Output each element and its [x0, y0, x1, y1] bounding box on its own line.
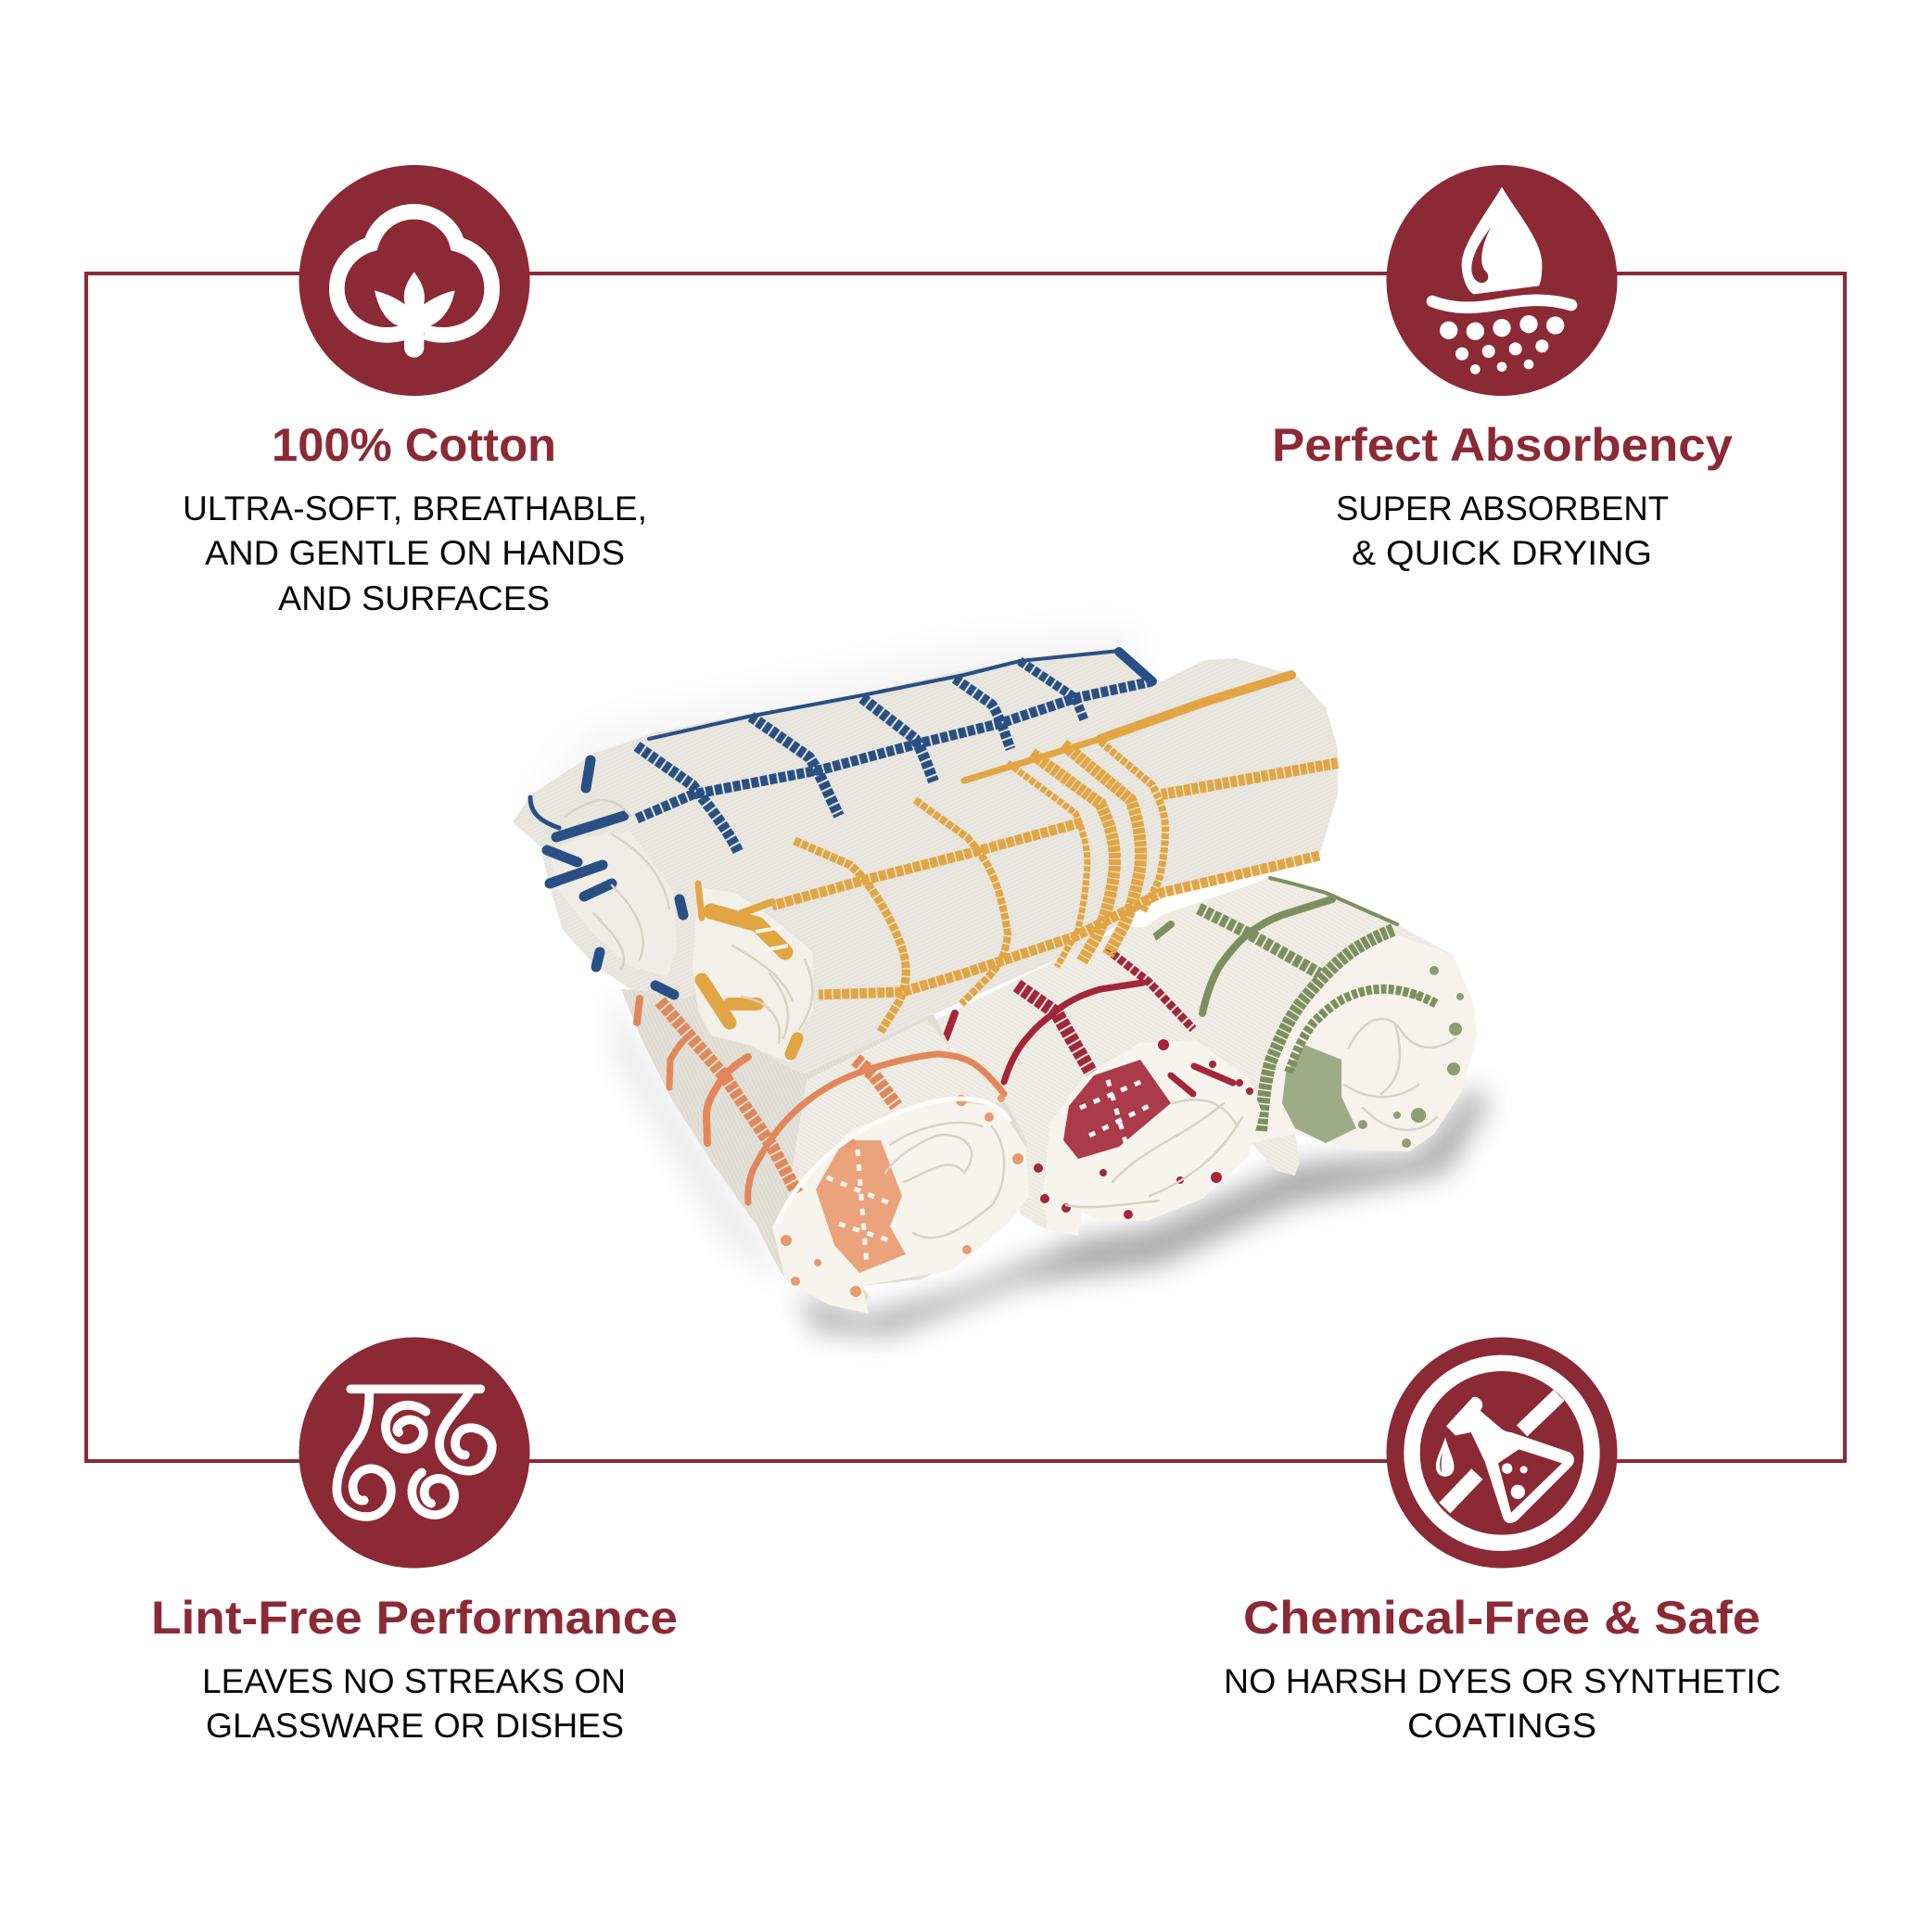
text block: NO HARSH DYES OR SYNTHETIC — [1224, 1662, 1781, 1700]
towel: red — [930, 927, 1261, 1236]
icon: lint swirls — [299, 1337, 530, 1569]
text block — [202, 1662, 626, 1745]
towel stack photo — [510, 630, 1488, 1335]
panel: Lint-Free Performance — [151, 1337, 678, 1745]
text block: & QUICK DRYING — [1352, 534, 1652, 572]
icon: cotton boll — [299, 165, 530, 396]
panel: Perfect Absorbency — [1272, 165, 1733, 572]
text block — [1336, 489, 1669, 572]
towel: green — [1125, 878, 1477, 1176]
icon: no chemicals — [1387, 1337, 1617, 1569]
heading: Chemical-Free & Safe — [1243, 1592, 1760, 1644]
shadows — [510, 630, 1488, 1335]
text block: GLASSWARE OR DISHES — [206, 1707, 624, 1745]
text block: AND SURFACES — [278, 579, 550, 617]
text block: SUPER ABSORBENT — [1336, 489, 1669, 527]
text block: COATINGS — [1407, 1707, 1596, 1745]
icon: water drop — [1387, 165, 1617, 396]
towel: yellow — [689, 658, 1338, 1074]
text block: ULTRA-SOFT, BREATHABLE, — [183, 489, 647, 527]
panel: 100% Cotton — [183, 165, 647, 617]
heading: Perfect Absorbency — [1272, 419, 1733, 471]
towel: blue — [513, 649, 1154, 998]
text block — [183, 489, 647, 617]
text block: AND GENTLE ON HANDS — [205, 534, 625, 572]
frame — [86, 273, 1845, 1461]
text block — [1224, 1662, 1781, 1745]
heading: 100% Cotton — [272, 419, 556, 471]
heading: Lint-Free Performance — [151, 1592, 678, 1644]
towel: coral — [621, 989, 1029, 1315]
text block: LEAVES NO STREAKS ON — [202, 1662, 626, 1700]
panel: Chemical-Free & Safe — [1224, 1337, 1781, 1745]
